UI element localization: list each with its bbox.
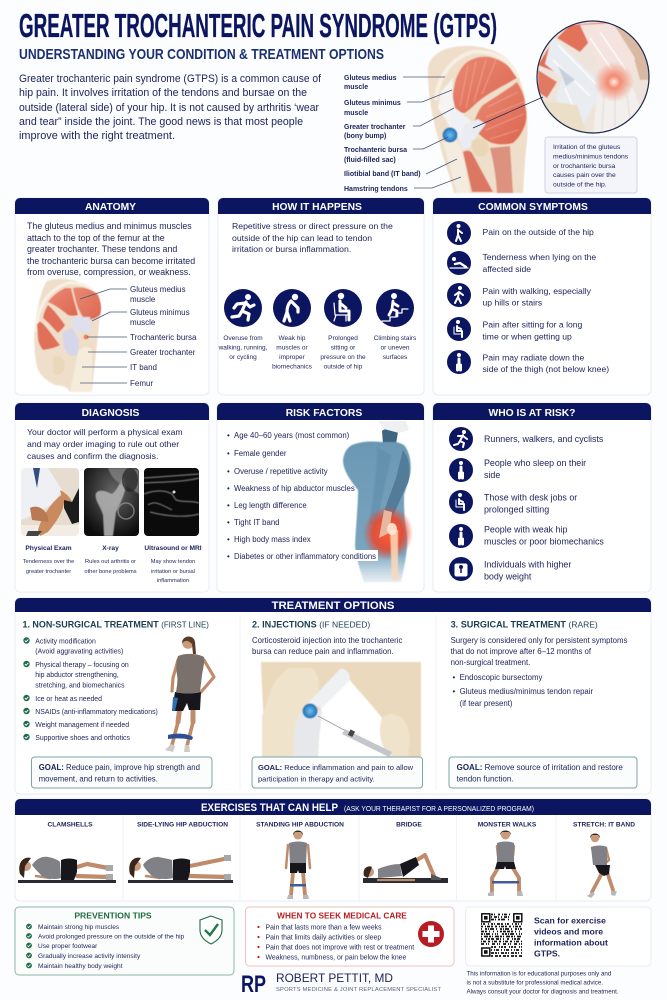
risk factor list: Leg length difference (234, 501, 307, 510)
risk factor list: Diabetes or other inflammatory conditions (234, 552, 376, 561)
heading: medical care: WHEN TO SEEK MEDICAL CARE (277, 910, 407, 920)
who list: Individuals with higher (484, 560, 571, 570)
intro text: outside (lateral side) of your hip. It is not caused by arthritis ‘wear (19, 102, 319, 114)
who list: Runners, walkers, and cyclists (484, 434, 604, 444)
symptoms list: side of the thigh (not below knee) (482, 364, 609, 374)
diagnosis captions: X-ray (102, 545, 119, 552)
logo: robert pettit (241, 971, 441, 998)
surgical text: • (452, 687, 456, 696)
prevention list: Use proper footwear (38, 943, 98, 950)
treatment list: Physical therapy – focusing on (35, 662, 129, 669)
symptoms list: up hills or stairs (482, 298, 542, 308)
injection text: bursa can reduce pain and inflammation. (252, 647, 394, 656)
anatomy labels: Femur (130, 379, 153, 388)
panel: treatment options (15, 598, 651, 794)
prevention list: Avoid prolonged pressure on the outside of the hip (38, 934, 185, 940)
panel: who is at risk (433, 403, 651, 592)
qr caption (534, 916, 608, 958)
heading: prevention tips: PREVENTION TIPS (74, 910, 152, 920)
anatomy labels: IT band (130, 363, 157, 372)
risk factor list: • (227, 552, 230, 561)
how it happens captions: or uneven (381, 344, 410, 352)
medical care list: Pain that does not improve with rest or treatment (266, 944, 414, 952)
exercise: it band stretch (587, 834, 617, 898)
treatment list: Supportive shoes and orthotics (35, 735, 130, 742)
symptoms list (482, 227, 609, 374)
goal box 3 (449, 757, 637, 788)
risk factor list: • (227, 535, 230, 544)
how it happens captions: or cycling (229, 354, 257, 361)
medical care list (257, 924, 414, 962)
hip anatomy labels: Greater trochanter (344, 124, 406, 131)
photo: physical exam (21, 468, 79, 536)
callout: irritation (545, 137, 637, 193)
callout: irritation: or trochanteric bursa (553, 163, 616, 170)
panel: diagnosis: Rules out arthritis or (85, 559, 136, 565)
prevention list: Maintain healthy body weight (38, 963, 123, 970)
inset zoom circle (473, 20, 651, 134)
goal box 3: tendon function. (457, 774, 514, 784)
panel: prevention tips (15, 907, 234, 975)
how it happens captions: surfaces (383, 354, 408, 361)
treatment list: Weight management if needed (35, 722, 129, 729)
column: non-surgical (22, 620, 214, 788)
panel: diagnosis: other bone problems (84, 569, 137, 575)
symptoms list: Pain on the outside of the hip (482, 227, 594, 237)
prevention list: Maintain strong hip muscles (38, 924, 120, 931)
person with hip pain (343, 421, 413, 582)
injection text (252, 636, 402, 656)
exercise labels: STRETCH: IT BAND (573, 822, 635, 828)
diagnosis captions: Physical Exam (25, 545, 72, 552)
goal box 3: GOAL: Remove source of irritation and restore (457, 763, 623, 772)
exercise: standing abduction (286, 830, 310, 899)
heading: exercises: EXERCISES THAT CAN HELP (201, 802, 338, 814)
heading: treatment options: TREATMENT OPTIONS (272, 600, 395, 612)
goal box 2: GOAL: Reduce inflammation and pain to allow (258, 763, 414, 772)
risk factor list: Female gender (234, 449, 287, 458)
panel: diagnosis: greater trochanter (26, 569, 71, 575)
icon: lying (447, 251, 471, 275)
photo: ultrasound (144, 468, 199, 536)
column: injections (252, 620, 422, 788)
symptoms list: Pain may radiate down the (482, 352, 584, 362)
disclaimer (466, 970, 619, 996)
risk factor list: • (227, 467, 230, 476)
goal box 1 (32, 757, 212, 788)
how it happens captions: muscles or (276, 344, 309, 352)
anatomy labels: Gluteus minimus (130, 308, 190, 317)
prevention list (38, 924, 185, 970)
exercise labels: SIDE-LYING HIP ABDUCTION (137, 822, 228, 828)
hip anatomy illustration (428, 46, 528, 193)
anatomy labels: Greater trochanter (130, 348, 196, 357)
icon: scale (449, 557, 473, 581)
how it happens captions: outside of hip (324, 364, 363, 370)
diagnosis captions (25, 545, 202, 552)
risk factor list: Weakness of hip abductor muscles (234, 484, 355, 493)
hip anatomy labels: muscle (344, 84, 368, 91)
diagnosis text: and may order imaging to rule out other (27, 439, 179, 449)
injection text: Corticosteroid injection into the trochanteric (252, 636, 402, 645)
logo: robert pettit: ROBERT PETTIT, MD (276, 971, 393, 985)
symptoms list: Tenderness when lying on the (482, 252, 596, 262)
treatment list: stretching, and biomechanics (35, 682, 125, 690)
how it happens captions: improper (279, 354, 306, 361)
callout: irritation: causes pain over the (553, 172, 616, 179)
panel: diagnosis: May show tendon (151, 559, 195, 565)
how it happens captions: Prolonged (328, 335, 358, 342)
who list: prolonged sitting (484, 504, 549, 514)
anatomy body text: attach to the top of the femur at the (27, 233, 165, 243)
anatomy body text (27, 221, 195, 277)
hip anatomy labels: (bony bump) (344, 133, 386, 140)
qr caption: GTPS. (534, 948, 560, 958)
hip anatomy labels: muscle (344, 110, 368, 117)
icon: weak muscles (273, 289, 311, 327)
how it happens text: irritation or bursa inflammation. (232, 244, 351, 254)
icon: shield (200, 916, 222, 944)
icon: medical cross (418, 921, 444, 947)
treatment list: hip abductor strengthening, (35, 672, 119, 679)
diagnosis captions: Ultrasound or MRI (144, 545, 202, 552)
who list: side (484, 470, 500, 480)
hip anatomy labels (344, 75, 461, 193)
how it happens captions: walking, running, (218, 344, 268, 352)
logo mark: RP (241, 971, 266, 998)
heading: how it happens: HOW IT HAPPENS (272, 202, 362, 213)
anatomy labels: muscle (130, 318, 156, 327)
anatomy labels: Gluteus medius (130, 285, 186, 294)
anatomy labels (80, 285, 197, 388)
risk factor list: • (227, 501, 230, 510)
goal box 1: GOAL: Reduce pain, improve hip strength and (39, 763, 200, 772)
risk factor list: • (227, 518, 230, 527)
surgical text: that do not improve after 6–12 months of (451, 647, 592, 656)
anatomy labels: muscle (130, 295, 156, 304)
prevention checks (26, 924, 32, 968)
exercise: clamshells (18, 857, 116, 883)
hip anatomy labels: Gluteus minimus (344, 100, 401, 107)
risk factor list: Overuse / repetitive activity (234, 467, 328, 476)
risk factor list: • (227, 484, 230, 493)
diagnosis text: causes and confirm the diagnosis. (27, 451, 158, 461)
treatment list: Activity modification (35, 638, 96, 646)
icon: sitting (324, 289, 362, 327)
exercise labels (47, 822, 635, 828)
icon: desk job (449, 490, 473, 514)
panel: diagnosis (15, 403, 209, 592)
qr code (481, 914, 522, 956)
how it happens text: Repetitive stress or direct pressure on the (232, 221, 393, 231)
risk factor list: Tight IT band (234, 518, 280, 527)
symptoms list: Pain with walking, especially (482, 286, 592, 296)
surgical text: • (452, 673, 456, 682)
icon: sitting pain (447, 317, 471, 341)
how it happens captions: biomechanics (272, 364, 313, 370)
goal box 2: participation in therapy and activity. (258, 774, 375, 784)
exercise: side-lying abduction (128, 855, 233, 883)
diagnosis text (27, 427, 183, 461)
panel: qr code (466, 907, 651, 966)
logo: robert pettit: SPORTS MEDICINE & JOINT REPLACEMENT SPECIALIST (276, 987, 441, 993)
hip anatomy labels: Trochanteric bursa (344, 147, 407, 154)
callout: irritation: outside of the hip. (553, 182, 607, 188)
exercise labels: STANDING HIP ABDUCTION (256, 822, 344, 828)
surgical text: (if tear present) (460, 699, 513, 708)
how it happens captions (218, 335, 417, 370)
icon: side sleeper (449, 458, 473, 482)
exercise labels: MONSTER WALKS (478, 822, 537, 828)
panel: diagnosis: inflammation (157, 578, 189, 584)
surgical text: Surgery is considered only for persistent symptoms (451, 636, 628, 645)
anatomy labels: Trochanteric bursa (130, 333, 197, 342)
anatomy body text: from overuse, compression, or weakness. (27, 267, 191, 277)
risk factor list (227, 431, 378, 561)
qr caption: information about (534, 938, 608, 948)
treatment list: NSAIDs (anti-inflammatory medications) (35, 709, 158, 716)
column: surgical (449, 620, 637, 788)
intro text (19, 73, 321, 142)
hip anatomy labels: Gluteus medius (344, 75, 397, 82)
column: non-surgical: 1. NON-SURGICAL TREATMENT (FIRST LINE) (22, 620, 209, 630)
how it happens captions: Climbing stairs (374, 335, 417, 342)
who list (484, 434, 604, 582)
heading: who is at risk: WHO IS AT RISK? (489, 408, 575, 419)
surgical text: Endoscopic bursectomy (460, 673, 542, 682)
heading: anatomy: ANATOMY (85, 202, 136, 213)
how it happens captions: sitting or (331, 344, 356, 352)
disclaimer: This information is for educational purposes only and (466, 970, 612, 978)
icon: runner (449, 427, 473, 451)
qr caption: videos and more (534, 926, 603, 936)
surgical text: Gluteus medius/minimus tendon repair (460, 687, 593, 696)
check bullets (23, 637, 30, 740)
risk factor list: • (227, 431, 230, 440)
intro text: hip pain. It involves irritation of the tendons and bursae on the (19, 87, 307, 99)
column: injections: 2. INJECTIONS (IF NEEDED) (252, 620, 370, 630)
how it happens text (232, 221, 393, 254)
heading: common symptoms: COMMON SYMPTOMS (478, 202, 588, 213)
icon: standing pain (447, 221, 471, 245)
anatomy body text: greater trochanter. These tendons and (27, 244, 177, 254)
how it happens captions: pressure on the (320, 354, 366, 361)
treatment list: Ice or heat as needed (35, 696, 102, 703)
surgical text: non-surgical treatment. (451, 658, 530, 667)
exercise labels: CLAMSHELLS (47, 822, 93, 828)
callout: irritation: Irritation of the gluteus (553, 144, 621, 151)
panel: how it happens (218, 198, 424, 395)
injection illustration (261, 662, 421, 757)
subtitle: UNDERSTANDING YOUR CONDITION & TREATMENT OPTIONS (19, 46, 384, 63)
diagnosis text: Your doctor will perform a physical exam (27, 427, 183, 437)
icon: weak muscles person (449, 524, 473, 548)
treatment list (35, 638, 158, 742)
hip anatomy labels: Iliotibial band (IT band) (344, 171, 421, 178)
symptoms list: Pain after sitting for a long (482, 320, 583, 330)
exercise: monster walks (488, 830, 523, 896)
medical care list: Weakness, numbness, or pain below the knee (266, 954, 406, 962)
prevention list: Gradually increase activity intensity (38, 953, 141, 960)
photo: x-ray (84, 468, 139, 536)
medical care list: Pain that lasts more than a few weeks (266, 924, 382, 932)
disclaimer: is not a substitute for professional medical advice. (466, 980, 603, 986)
how it happens captions: Overuse from (223, 335, 263, 342)
risk factor list: High body mass index (234, 535, 311, 544)
heading: diagnosis: DIAGNOSIS (82, 408, 140, 419)
risk factor list: • (227, 449, 230, 458)
callout: irritation: medius/minimus tendons (553, 154, 629, 160)
heading: risk factors: RISK FACTORS (286, 408, 362, 419)
exercise labels: BRIDGE (396, 822, 422, 828)
intro text: improve with the right treatment. (19, 130, 175, 142)
icon: climbing stairs (376, 289, 414, 327)
disclaimer: Always consult your doctor for diagnosis and treatment. (466, 988, 619, 996)
goal box 1: movement, and return to activities. (39, 774, 158, 784)
exercise: bridge (363, 855, 448, 883)
qr caption: Scan for exercise (534, 916, 606, 926)
column: surgical: 3. SURGICAL TREATMENT (RARE) (451, 620, 598, 630)
hip anatomy labels: (fluid-filled sac) (344, 157, 396, 164)
woman with resistance band (165, 636, 214, 752)
goal box 2 (252, 757, 422, 788)
how it happens text: outside of the hip can lead to tendon (232, 233, 372, 243)
who list: muscles or poor biomechanics (484, 536, 604, 546)
who list: People who sleep on their (484, 458, 586, 468)
who list: Those with desk jobs or (484, 492, 577, 502)
panel: exercises (15, 799, 651, 901)
panel: exercises: (ASK YOUR THERAPIST FOR A PERSONALIZED PROGRAM) (344, 806, 534, 813)
symptoms list: affected side (482, 264, 531, 274)
panel: anatomy (15, 198, 209, 395)
panel: diagnosis: irritation or bursal (151, 569, 195, 575)
panel: common symptoms (433, 198, 651, 395)
how it happens captions: Weak hip (279, 335, 306, 342)
anatomy body text: the trochanteric bursa can become irritated (27, 256, 195, 266)
icon: walking (447, 283, 471, 307)
anatomy illustration (34, 279, 101, 392)
surgical text (451, 636, 628, 708)
anatomy body text: The gluteus medius and minimus muscles (27, 221, 192, 231)
treatment list: (Avoid aggravating activities) (35, 648, 123, 656)
who list: People with weak hip (484, 524, 567, 534)
symptoms list: time or when getting up (482, 332, 572, 342)
icon: running (224, 289, 262, 327)
medical care list: Pain that limits daily activities or sleep (266, 934, 381, 942)
risk factor list: Age 40–60 years (most common) (234, 431, 350, 440)
icon: radiating pain (447, 350, 471, 374)
intro text: Greater trochanteric pain syndrome (GTPS) is a common cause of (19, 73, 321, 85)
panel: risk factors (217, 403, 424, 592)
who list: body weight (484, 572, 532, 582)
panel: diagnosis: Tenderness over the (23, 559, 74, 565)
panel: when to seek medical care (246, 907, 454, 966)
intro text: and tear” inside the joint. The good news is that most people (19, 116, 303, 128)
hip anatomy labels: Hamstring tendons (344, 186, 408, 193)
